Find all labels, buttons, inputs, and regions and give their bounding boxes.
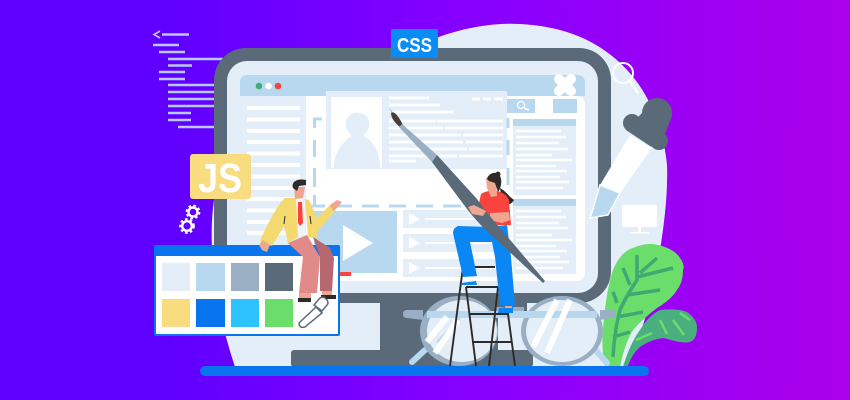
header button [553,99,577,113]
man shoes [298,295,336,302]
woman arm [490,212,510,223]
small monitor icon [622,205,657,234]
woman shirt [478,191,511,225]
woman hair [487,172,501,192]
dashed frame [308,119,461,206]
CSS badge [391,29,438,58]
browser window [240,75,585,281]
dropper tip [590,185,620,218]
bridge [495,307,524,311]
temple arms [412,318,607,363]
dropper bulb [623,98,672,150]
man back leg [313,237,334,291]
giant paintbrush [388,107,545,283]
video player [314,211,397,273]
small dropper icon [299,297,328,327]
gears [180,206,199,233]
plant [602,244,697,367]
red progress bar [340,272,351,276]
background blob [212,24,667,367]
woman shoes [462,281,513,313]
ferrule [399,124,437,162]
man right hand [330,200,342,211]
small leaf [623,309,697,367]
man shirt [295,198,305,237]
title bar [240,75,585,96]
woman socks [505,306,512,308]
ponytail [500,188,514,204]
ladder [450,267,515,366]
man hair [293,179,306,191]
left lens [420,296,498,366]
search box [507,99,535,113]
close icon [559,79,571,91]
handle [432,155,545,283]
left sidebar [240,96,306,281]
card text [389,98,503,161]
window dots [256,83,281,89]
man head [294,187,305,199]
right hinge [600,310,616,320]
woman jeans [453,225,515,305]
small scroll bars [506,118,510,185]
man tie [298,202,303,226]
code lines [153,31,223,127]
monitor screen [227,61,598,293]
right lens [521,296,603,366]
right column top [513,119,576,195]
man sitting [259,179,342,302]
large leaf veins [613,255,673,357]
CSS badge: CSS [397,35,432,57]
swatches row 2 [162,299,293,327]
man jacket [260,198,336,246]
large dropper [590,98,672,218]
woman head [486,178,497,197]
man jacket pockets [284,216,311,224]
monitor neck [380,303,527,353]
avatar [334,113,380,168]
woman hands [468,205,486,216]
swatches row 1 [162,263,293,291]
lens streak [437,318,460,342]
JS badge: JS [198,155,242,201]
brush tip [388,107,394,115]
bristles [391,112,403,127]
lens glare [427,300,570,353]
woman painter [453,172,515,313]
monitor [214,48,611,367]
floor line [200,366,649,376]
man front leg [288,235,320,293]
magnifier icon [613,63,638,93]
small leaf veins [636,313,690,340]
large leaf [602,244,684,367]
profile card [326,91,507,169]
left hinge [403,310,423,320]
color palette panel [154,245,340,336]
eyeglasses [403,296,616,366]
frame band through lenses [427,311,597,318]
man left hand [259,240,270,252]
right column bottom [513,199,576,274]
video playlist [403,210,508,277]
man socks [299,291,332,298]
monitor foot [291,350,533,367]
